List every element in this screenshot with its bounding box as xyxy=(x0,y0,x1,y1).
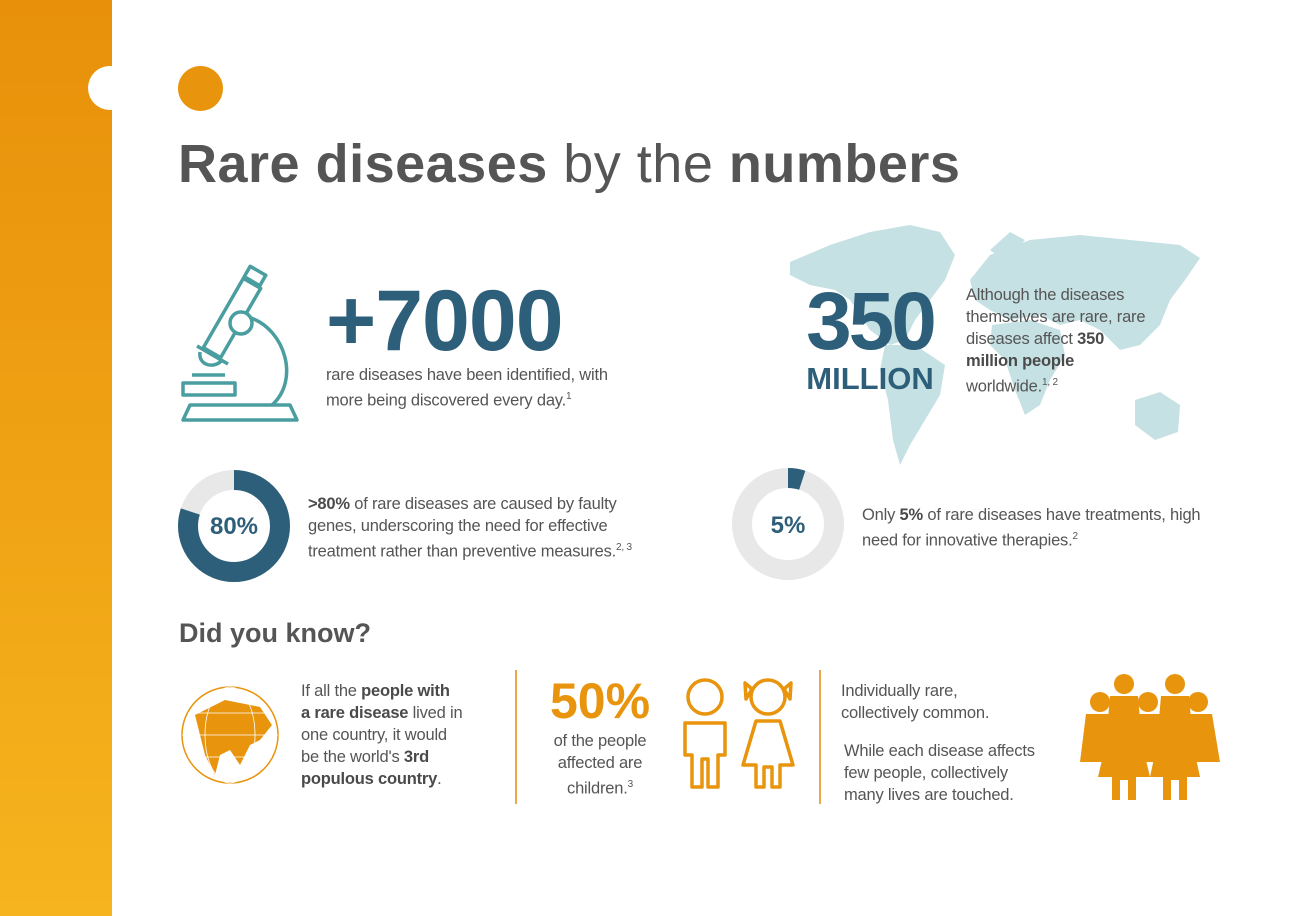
donut 5%: 5% xyxy=(771,512,805,539)
text: globe: a rare disease lived in xyxy=(301,704,462,722)
text: globe: one country, it would xyxy=(301,726,447,744)
stat: 50% xyxy=(550,673,650,798)
text 80%: >80% of rare diseases are caused by faulty genes, underscoring the need for effective treatment rather than preventive measures.2, 3 xyxy=(308,495,632,560)
stat: 50%: 50% xyxy=(550,673,650,729)
stat: 7000: rare diseases have been identified, with more being discovered every day.1 xyxy=(326,366,608,410)
text: collectively: While each disease affects xyxy=(844,742,1035,760)
text: globe xyxy=(301,682,462,788)
icon: globe xyxy=(181,686,279,784)
text: 350 million: Although the diseases themselves are rare, rare diseases affect 350 million people worldwide.1, 2 xyxy=(966,286,1145,396)
donut 80% xyxy=(178,470,290,582)
text: globe: populous country. xyxy=(301,770,442,788)
stat: 50%: of the people affected are children.3 xyxy=(554,732,646,798)
stat: 350 million: 350 xyxy=(806,276,934,367)
text: collectively: many lives are touched. xyxy=(844,786,1014,804)
side band xyxy=(0,0,112,916)
text: globe: If all the people with xyxy=(301,682,450,700)
text: globe: be the world's 3rd xyxy=(301,748,429,766)
donut 80%: 80% xyxy=(210,513,258,540)
text: collectively: collectively common. xyxy=(841,704,989,722)
text 5%: Only 5% of rare diseases have treatments, high need for innovative therapies.2 xyxy=(862,506,1200,550)
stat: 7000 xyxy=(326,273,608,410)
stat: 7000: +7000 xyxy=(326,273,563,369)
icon: microscope xyxy=(181,264,299,422)
notch xyxy=(88,66,132,110)
text: collectively: Individually rare, xyxy=(841,682,958,700)
orange dot xyxy=(178,66,223,111)
title: Rare diseases by the numbers xyxy=(178,134,960,194)
donut 5% xyxy=(732,468,844,580)
heading: did you know: Did you know? xyxy=(179,618,371,648)
text: collectively xyxy=(841,682,1035,804)
stat: 350 million: MILLION xyxy=(806,361,934,396)
text: collectively: few people, collectively xyxy=(844,764,1008,782)
icon: children xyxy=(683,678,795,789)
icon: crowd xyxy=(1080,674,1220,800)
